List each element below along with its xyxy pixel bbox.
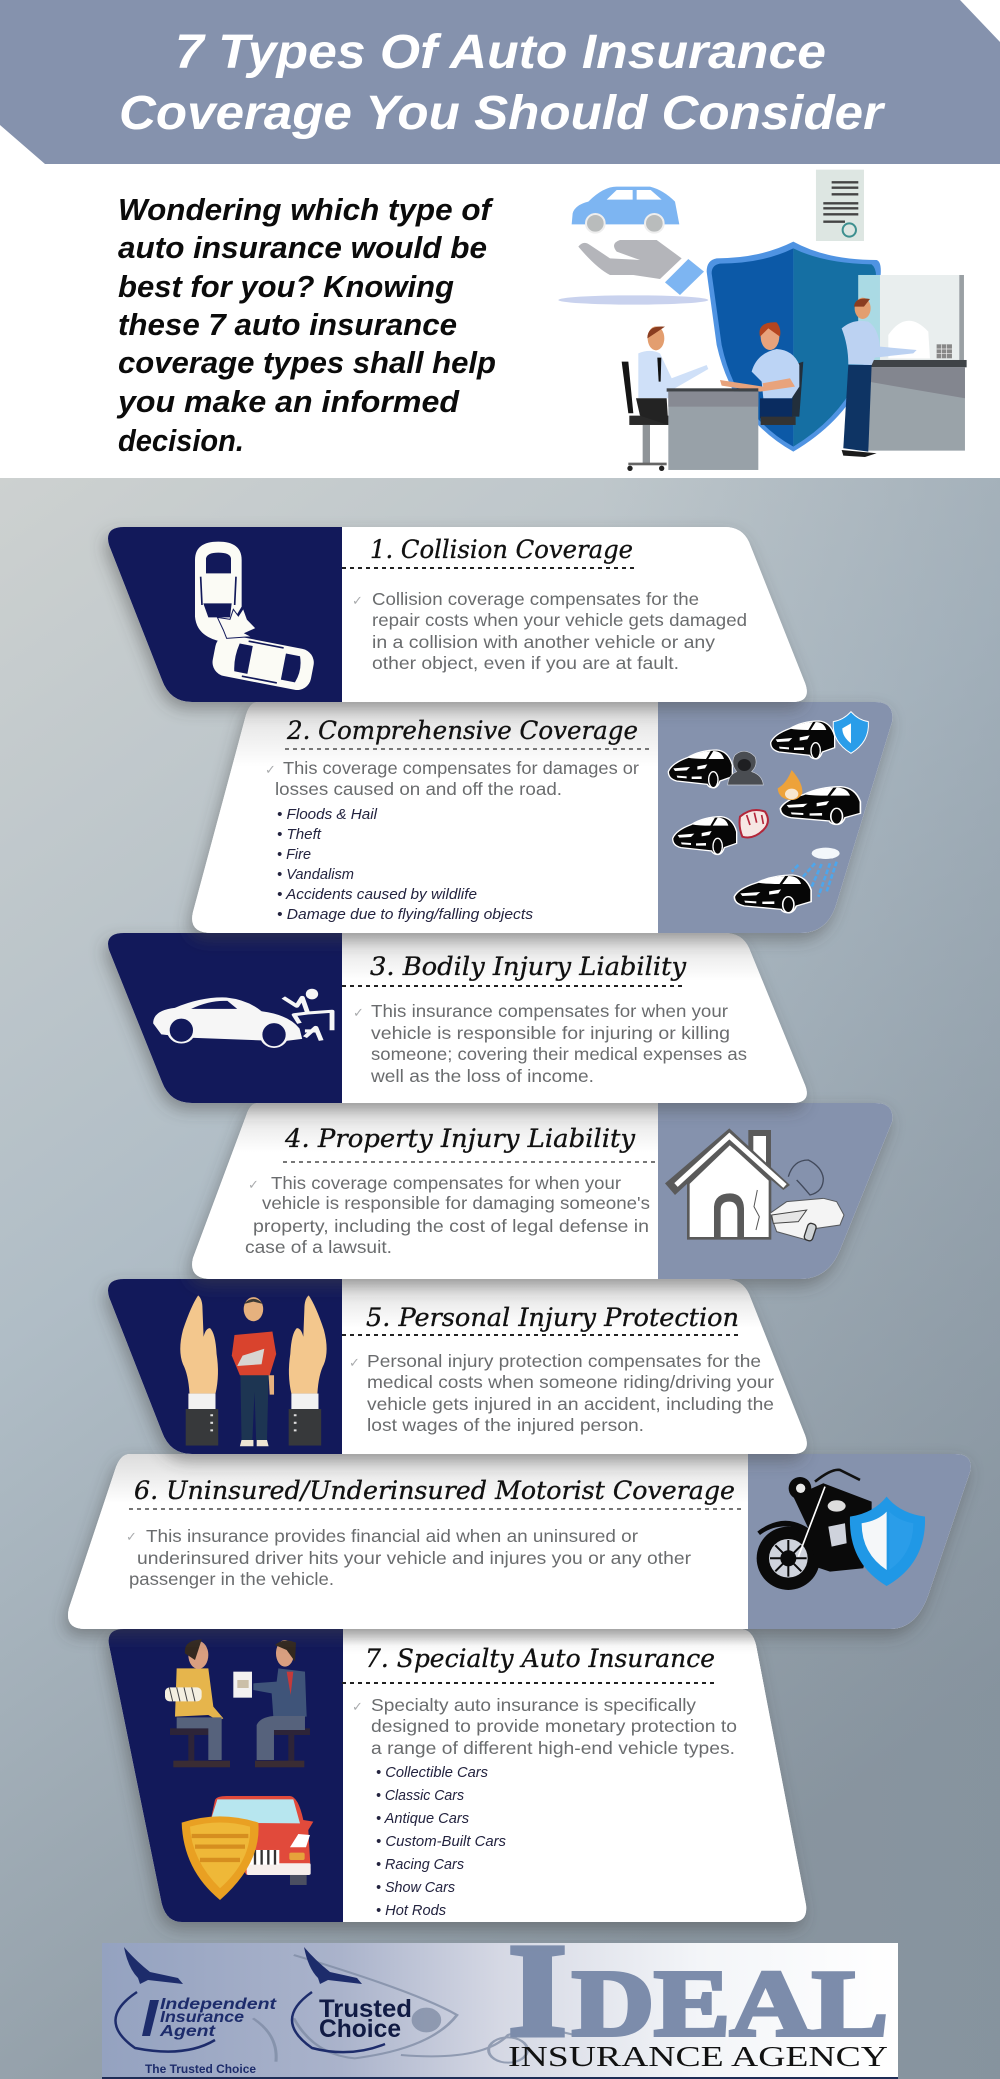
Independent Insurance Agent logo [115, 1947, 277, 2076]
body text [265, 758, 639, 799]
left hand [180, 1295, 218, 1446]
body text: This coverage compensates for damages or [283, 758, 639, 778]
car with fist [673, 810, 768, 855]
body text: Personal injury protection compensates for the [367, 1351, 761, 1371]
house [665, 1128, 790, 1238]
intro text [116, 192, 496, 458]
body text: case of a lawsuit. [245, 1237, 392, 1257]
body text [353, 1001, 747, 1086]
body text: This coverage compensates for when your [271, 1173, 621, 1193]
vehicle type list: • Racing Cars [376, 1857, 464, 1873]
icon: shield [707, 242, 881, 452]
intro text: Wondering which type of [118, 192, 494, 227]
top car [195, 542, 242, 642]
heading: 3. Bodily Injury Liability [370, 952, 686, 981]
body text: ✓ [352, 594, 363, 609]
Independent Insurance Agent logo: Agent [159, 2023, 216, 2040]
card 1: collision coverage [100, 527, 812, 702]
Independent Insurance Agent logo: Independent [160, 1996, 277, 2013]
vehicle type list: • Collectible Cars [376, 1765, 488, 1781]
hazards list: • Fire [277, 847, 311, 863]
right hand [289, 1295, 327, 1446]
vehicle type list: • Show Cars [376, 1880, 455, 1896]
body text: property, including the cost of legal defense in [253, 1216, 649, 1236]
card 2: comprehensive coverage [185, 702, 898, 933]
blue shield [850, 1497, 925, 1586]
Ideal Insurance Agency wordmark: DEAL [572, 1952, 888, 2056]
car with shield [771, 712, 868, 759]
intro text: coverage types shall help [118, 345, 496, 380]
agent [233, 1640, 310, 1767]
car [153, 997, 302, 1047]
title: Coverage You Should Consider [119, 87, 885, 140]
title [119, 26, 885, 140]
body text: Collision coverage compensates for the [372, 589, 699, 609]
Trusted Choice logo [292, 1947, 412, 2052]
Ideal Insurance Agency wordmark: I [508, 1916, 567, 2064]
body text: lost wages of the injured person. [367, 1415, 644, 1435]
body text: someone; covering their medical expenses as [371, 1044, 747, 1064]
body text: in a collision with another vehicle or any [372, 632, 715, 652]
card 6: uninsured/underinsured motorist coverage [60, 1454, 978, 1629]
body text [126, 1526, 691, 1589]
intro text: best for you? Knowing [118, 269, 454, 304]
crashed car [770, 1160, 844, 1242]
body text: Specialty auto insurance is specifically [371, 1695, 696, 1715]
card 5: personal injury protection [100, 1279, 812, 1454]
icon: two cars colliding [195, 542, 316, 692]
hazards list: • Vandalism [277, 867, 354, 883]
body text: vehicle gets injured in an accident, including the [367, 1394, 774, 1414]
red car with gold shield [182, 1796, 313, 1900]
icon: glass counter [858, 275, 967, 451]
intro text: auto insurance would be [118, 230, 487, 265]
heading: 5. Personal Injury Protection [366, 1303, 739, 1332]
Trusted Choice logo: Choice [319, 2015, 401, 2043]
icon: car hitting pedestrian [153, 990, 332, 1047]
heading: 1. Collision Coverage [370, 535, 633, 564]
vehicle type list: • Classic Cars [376, 1788, 464, 1804]
injured man [232, 1297, 276, 1446]
body text: designed to provide monetary protection to [371, 1716, 737, 1736]
title: 7 Types Of Auto Insurance [175, 26, 826, 79]
heading: 2. Comprehensive Coverage [286, 716, 638, 745]
body text: a range of different high-end vehicle types. [371, 1738, 735, 1758]
icon: car crashed into house [665, 1128, 844, 1242]
body text: repair costs when your vehicle gets damaged [372, 610, 747, 630]
car with rain cloud [734, 848, 840, 913]
falling person [283, 990, 332, 1041]
body text: vehicle is responsible for damaging someone's [262, 1193, 650, 1213]
body text: ✓ [349, 1356, 360, 1371]
body text: ✓ [265, 763, 276, 778]
decorative swirls [253, 1955, 574, 2063]
motorcycle [757, 1470, 872, 1590]
impact burst [217, 608, 256, 638]
icon: document [816, 170, 864, 241]
body text: other object, even if you are at fault. [372, 653, 679, 673]
body text: medical costs when someone riding/driving your [367, 1372, 774, 1392]
customer [165, 1639, 230, 1767]
card 3: bodily injury liability [100, 933, 812, 1103]
hazards list: • Floods & Hail [277, 807, 378, 823]
Ideal Insurance Agency wordmark [508, 1916, 888, 2073]
car with fire [778, 770, 860, 825]
footer logo banner [102, 1916, 898, 2079]
body text: ✓ [126, 1530, 137, 1545]
card 4: property injury liability [185, 1103, 898, 1279]
car with thief [668, 750, 763, 788]
hero illustration: agents at desks with shield [558, 170, 967, 471]
icon: seated customer agent [622, 326, 708, 471]
icon: insured car on hand [558, 187, 708, 305]
Independent Insurance Agent logo: The Trusted Choice [145, 2062, 256, 2076]
body text [349, 1351, 774, 1435]
heading: 4. Property Injury Liability [284, 1124, 635, 1153]
heading: 7. Specialty Auto Insurance [365, 1644, 715, 1673]
body text: vehicle is responsible for injuring or killing [371, 1023, 730, 1043]
body text: This insurance compensates for when your [371, 1001, 728, 1021]
header banner [0, 0, 1000, 164]
body text: losses caused on and off the road. [275, 779, 562, 799]
intro text: you make an informed [116, 384, 460, 419]
vehicle type list [376, 1765, 506, 1919]
body text: ✓ [352, 1700, 363, 1715]
Independent Insurance Agent logo: Insurance [160, 2009, 244, 2026]
Trusted Choice logo: Trusted [319, 1995, 412, 2023]
icon: cars with hazards [668, 712, 868, 913]
body text: This insurance provides financial aid when an uninsured or [146, 1526, 638, 1546]
body text: ✓ [353, 1006, 364, 1021]
hazards list: • Accidents caused by wildlife [277, 887, 477, 903]
vehicle type list: • Antique Cars [376, 1811, 469, 1827]
heading: 6. Uninsured/Underinsured Motorist Coverage [134, 1476, 735, 1505]
icon: seated customer [720, 322, 803, 425]
intro text: decision. [118, 423, 244, 458]
vehicle type list: • Custom-Built Cars [376, 1834, 506, 1850]
body text [352, 589, 747, 673]
background panel [0, 478, 1000, 2079]
hazards list: • Theft [277, 827, 322, 843]
icon: motorcycle and shield [757, 1470, 925, 1590]
body text [245, 1173, 650, 1257]
body text: underinsured driver hits your vehicle and injures you or any other [137, 1548, 691, 1568]
icon: client and agent talking with shielded car [165, 1639, 313, 1900]
Ideal Insurance Agency wordmark: INSURANCE AGENCY [508, 2041, 888, 2073]
icon: standing agent [842, 298, 917, 457]
vehicle type list: • Hot Rods [376, 1903, 446, 1919]
icon: protective hands around injured man [180, 1295, 327, 1446]
body text: passenger in the vehicle. [129, 1569, 334, 1589]
intro text: these 7 auto insurance [118, 307, 457, 342]
body text: well as the loss of income. [370, 1066, 594, 1086]
hazards list: • Damage due to flying/falling objects [277, 907, 533, 923]
bottom car [210, 632, 316, 692]
card 7: specialty auto insurance [100, 1629, 813, 1922]
body text [352, 1695, 737, 1758]
body text: ✓ [248, 1178, 259, 1193]
icon: desk [667, 388, 758, 470]
hazards list [277, 807, 533, 923]
